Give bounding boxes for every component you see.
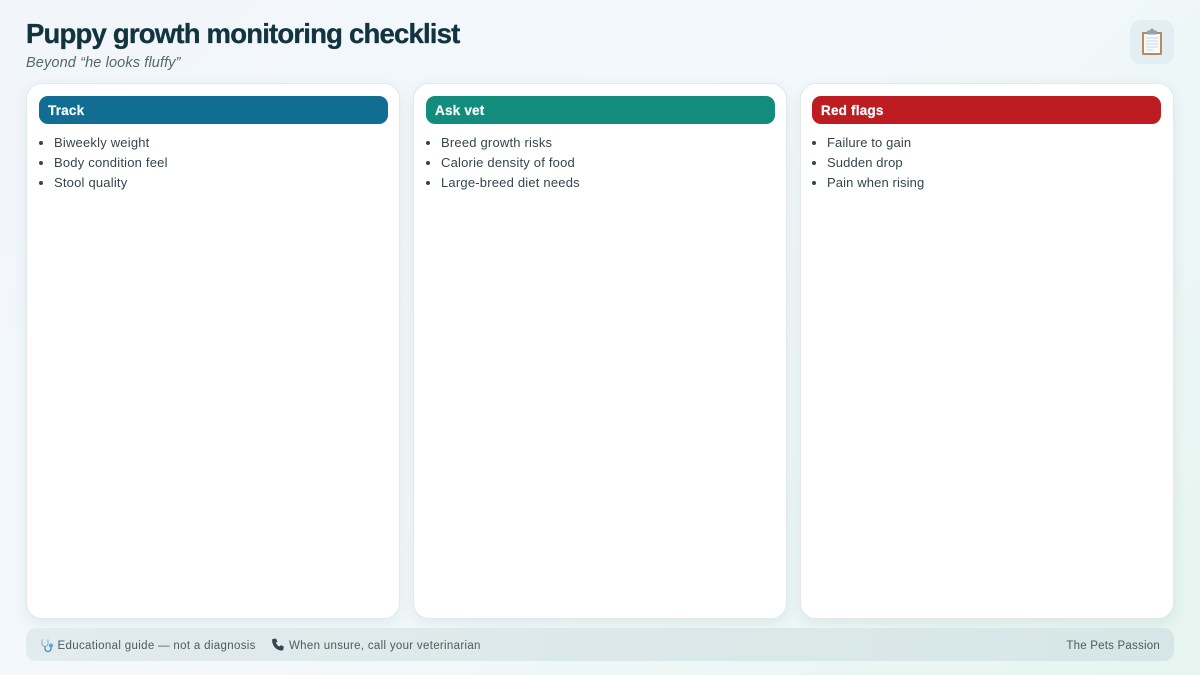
list: track items: Stool quality	[54, 175, 127, 190]
panel: track	[26, 83, 400, 619]
list: track items: Biweekly weight	[54, 135, 150, 150]
icon: clipboard badge	[1130, 20, 1174, 64]
list: ask vet items: Large-breed diet needs	[441, 175, 580, 190]
list: ask vet items	[426, 135, 580, 190]
list: ask vet items: Calorie density of food	[441, 155, 575, 170]
call vet text: When unsure, call your veterinarian	[289, 640, 481, 652]
list: ask vet items: Breed growth risks	[441, 135, 552, 150]
brand: The Pets Passion	[1066, 640, 1160, 652]
disclaimer text: Educational guide — not a diagnosis	[58, 640, 256, 652]
list: red flag items: Failure to gain	[827, 135, 911, 150]
heading: red flags	[812, 96, 1161, 124]
title: Puppy growth monitoring checklist	[26, 18, 460, 49]
list: red flag items: Sudden drop	[827, 155, 903, 170]
heading: red flags: Red flags	[821, 103, 884, 118]
panel: red flags	[800, 83, 1174, 619]
panel: ask vet	[413, 83, 787, 619]
heading: ask vet	[426, 96, 774, 124]
icon: phone	[272, 638, 284, 650]
list: track items: Body condition feel	[54, 155, 168, 170]
subtitle: Beyond “he looks fluffy”	[26, 55, 181, 71]
heading: track: Track	[48, 103, 84, 118]
footer bar	[26, 628, 1174, 661]
list: track items	[39, 135, 168, 190]
list: red flag items: Pain when rising	[827, 175, 924, 190]
heading: ask vet: Ask vet	[435, 103, 484, 118]
list: red flag items	[812, 135, 924, 190]
icon: stethoscope	[41, 640, 53, 652]
heading: track	[39, 96, 388, 124]
